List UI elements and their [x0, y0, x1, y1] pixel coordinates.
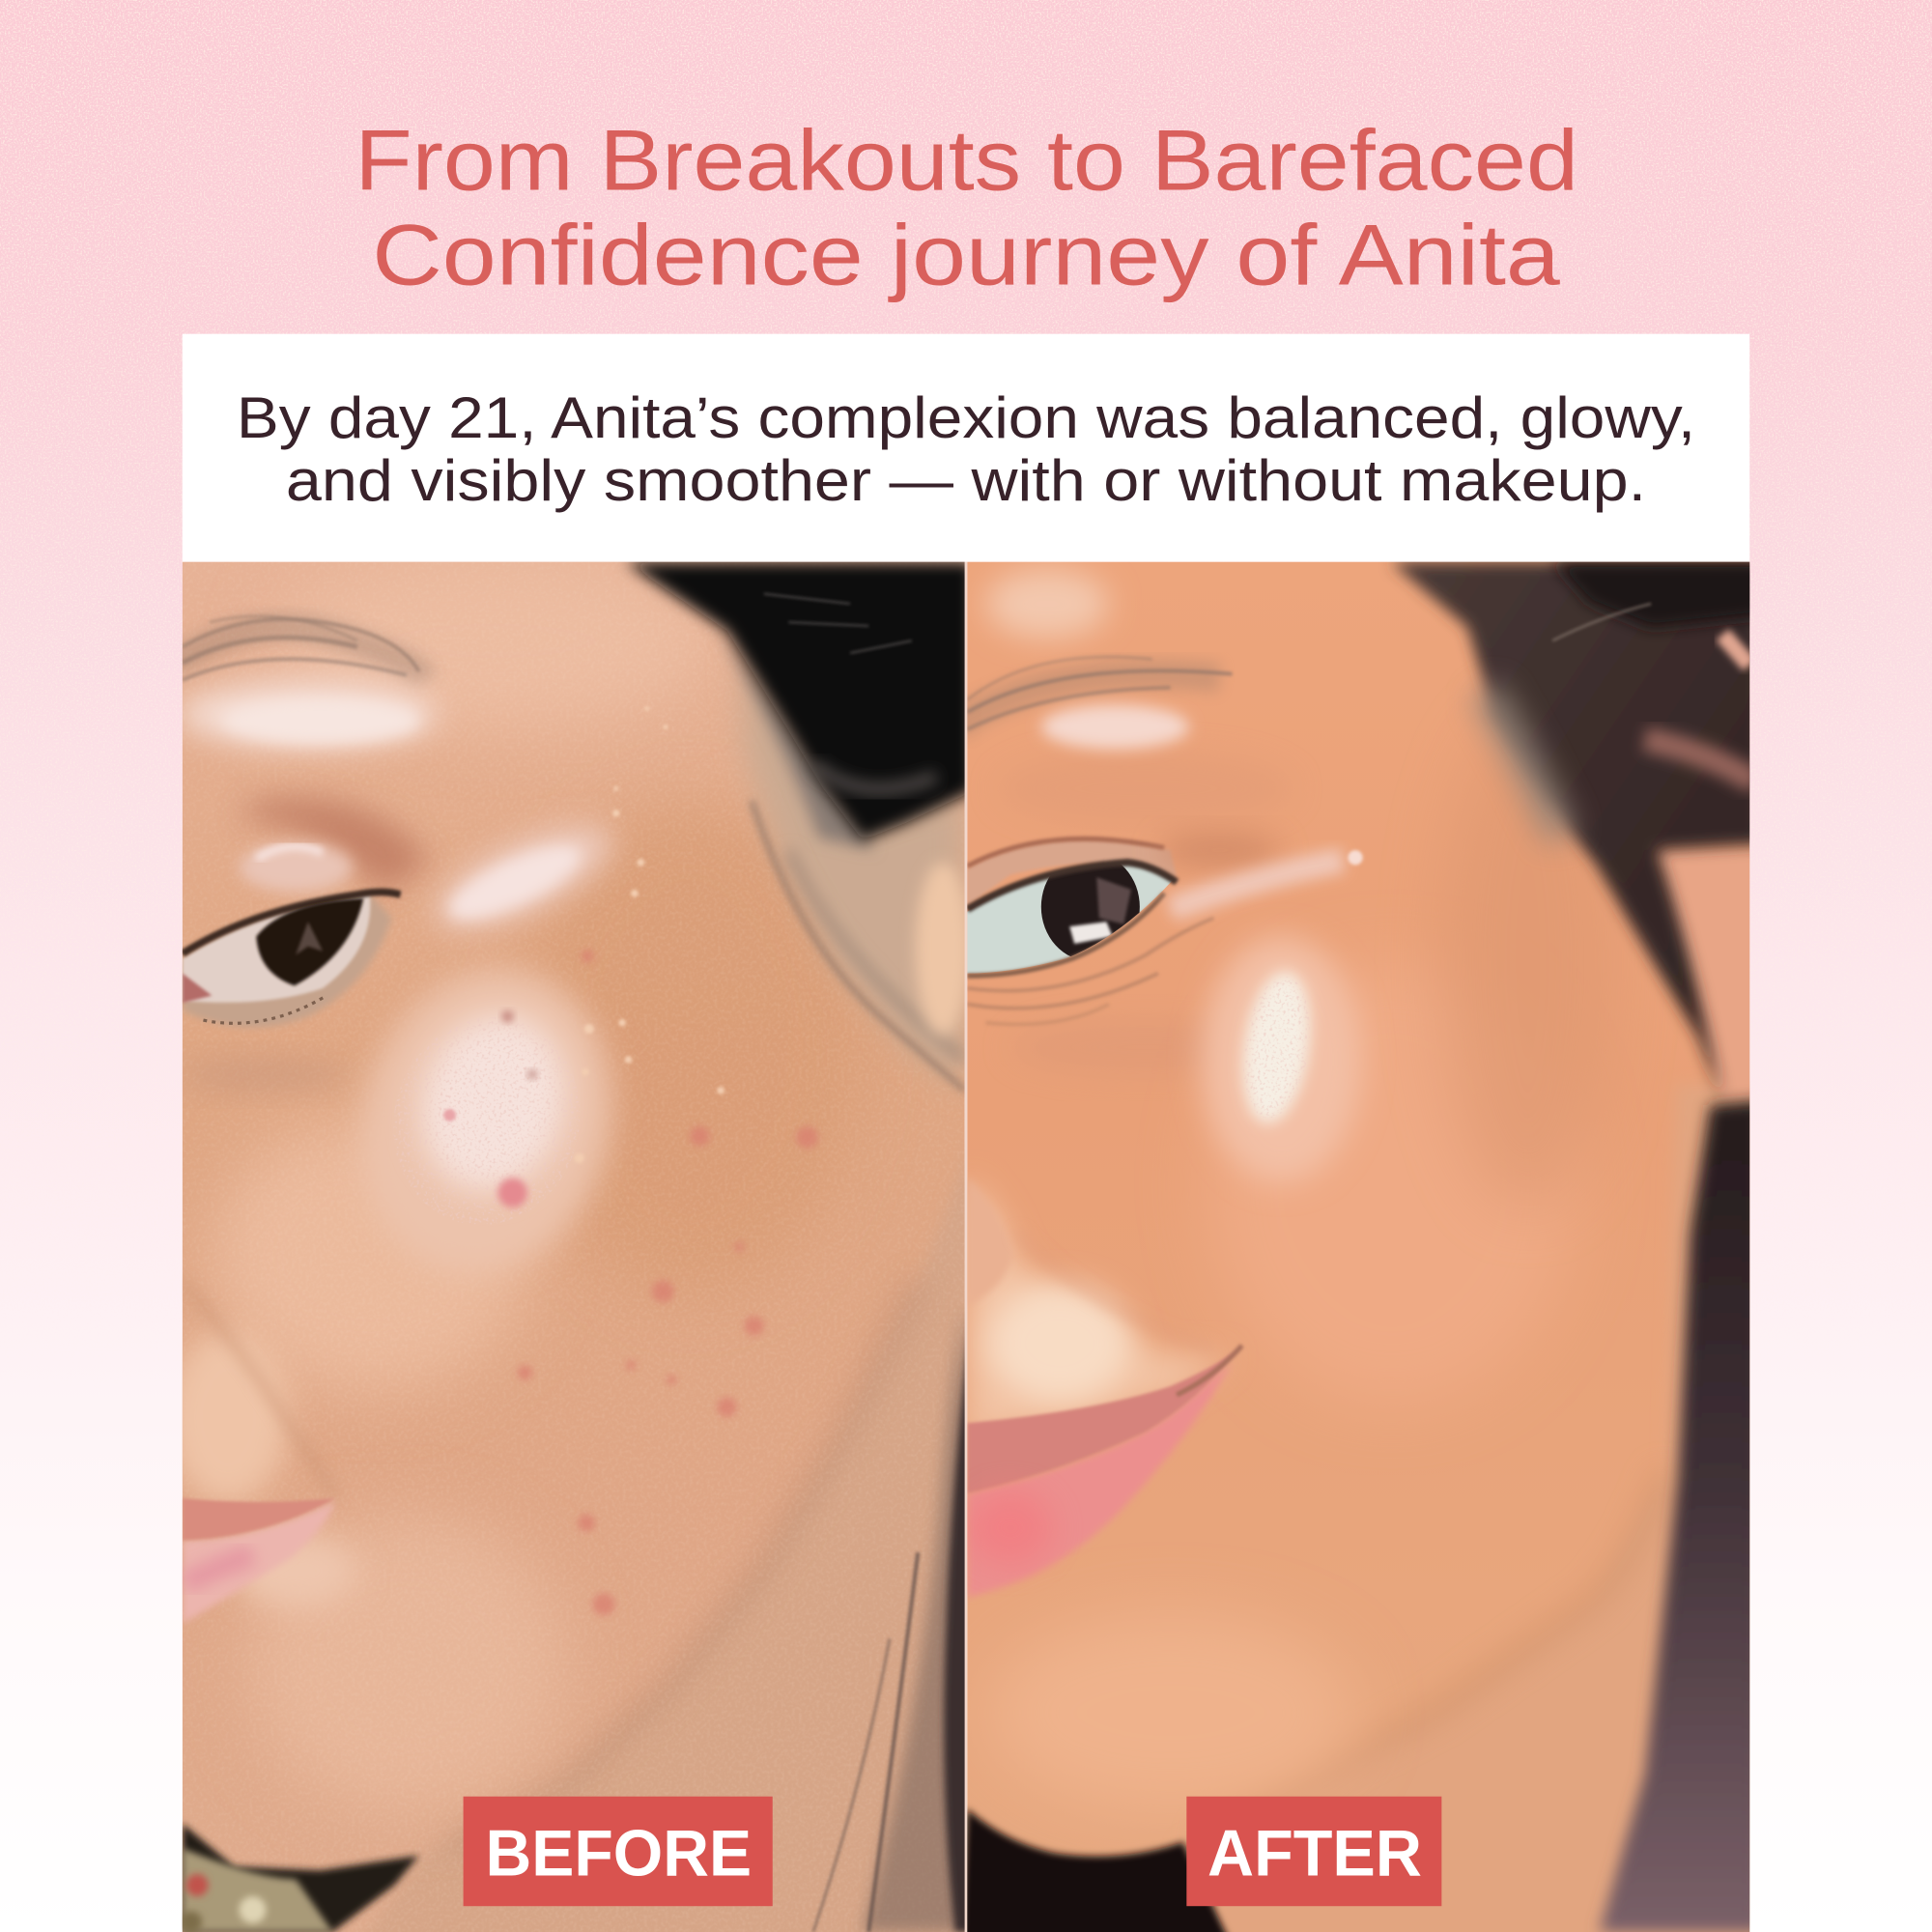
cheek highlight after [1202, 936, 1361, 1182]
summary text: and visibly smoother — with or without makeup. [286, 448, 1646, 513]
badge: before: BEFORE [486, 1817, 752, 1889]
panel: before photo [166, 554, 985, 1932]
nose [166, 1282, 335, 1503]
panel: summary text card [183, 334, 1749, 562]
neck after [1171, 1084, 1762, 1932]
clothing at chin [180, 1824, 419, 1932]
nose after [967, 1177, 1233, 1441]
title: From Breakouts to Barefaced [355, 111, 1578, 208]
eyelid [967, 833, 1282, 906]
title: Confidence journey of Anita [372, 207, 1560, 303]
badge: before [464, 1797, 773, 1906]
acne spots [518, 950, 818, 1615]
brow highlight after [985, 569, 1189, 750]
pale bumps [574, 706, 724, 1163]
divider between photos [965, 562, 967, 1932]
pale hair fringe [712, 622, 970, 1091]
ear and side skin [1658, 850, 1762, 1100]
cheek highlight [327, 941, 645, 1302]
after lips [967, 1346, 1242, 1597]
dark shadow under chin [961, 1808, 1233, 1932]
panel: after photo [955, 562, 1762, 1932]
before lips [183, 1498, 357, 1624]
hair upper right [1391, 562, 1762, 1100]
under-eye highlight [1171, 850, 1363, 909]
badge: after [1186, 1797, 1441, 1906]
eyelid crease shadow [179, 797, 431, 1092]
skin tone [985, 715, 1614, 1811]
summary text [237, 385, 1695, 513]
summary text: By day 21, Anita’s complexion was balanced, glowy, [237, 385, 1695, 450]
neck [381, 1163, 965, 1932]
eyebrow after [955, 657, 1233, 729]
eyelid highlight [239, 842, 353, 892]
brow highlight [179, 680, 438, 750]
after eye [967, 853, 1177, 976]
temple highlight [422, 806, 625, 950]
eyebrow [173, 616, 425, 680]
badge: after: AFTER [1208, 1817, 1422, 1889]
hair lower right [1600, 1100, 1762, 1932]
before eye [183, 892, 401, 1028]
under-eye lines [967, 918, 1213, 1024]
title [355, 111, 1578, 303]
black hair [626, 562, 974, 840]
forehead and cheek tone [183, 554, 965, 1932]
hair strands lower right [813, 1293, 974, 1932]
background gradient [0, 0, 1932, 1515]
